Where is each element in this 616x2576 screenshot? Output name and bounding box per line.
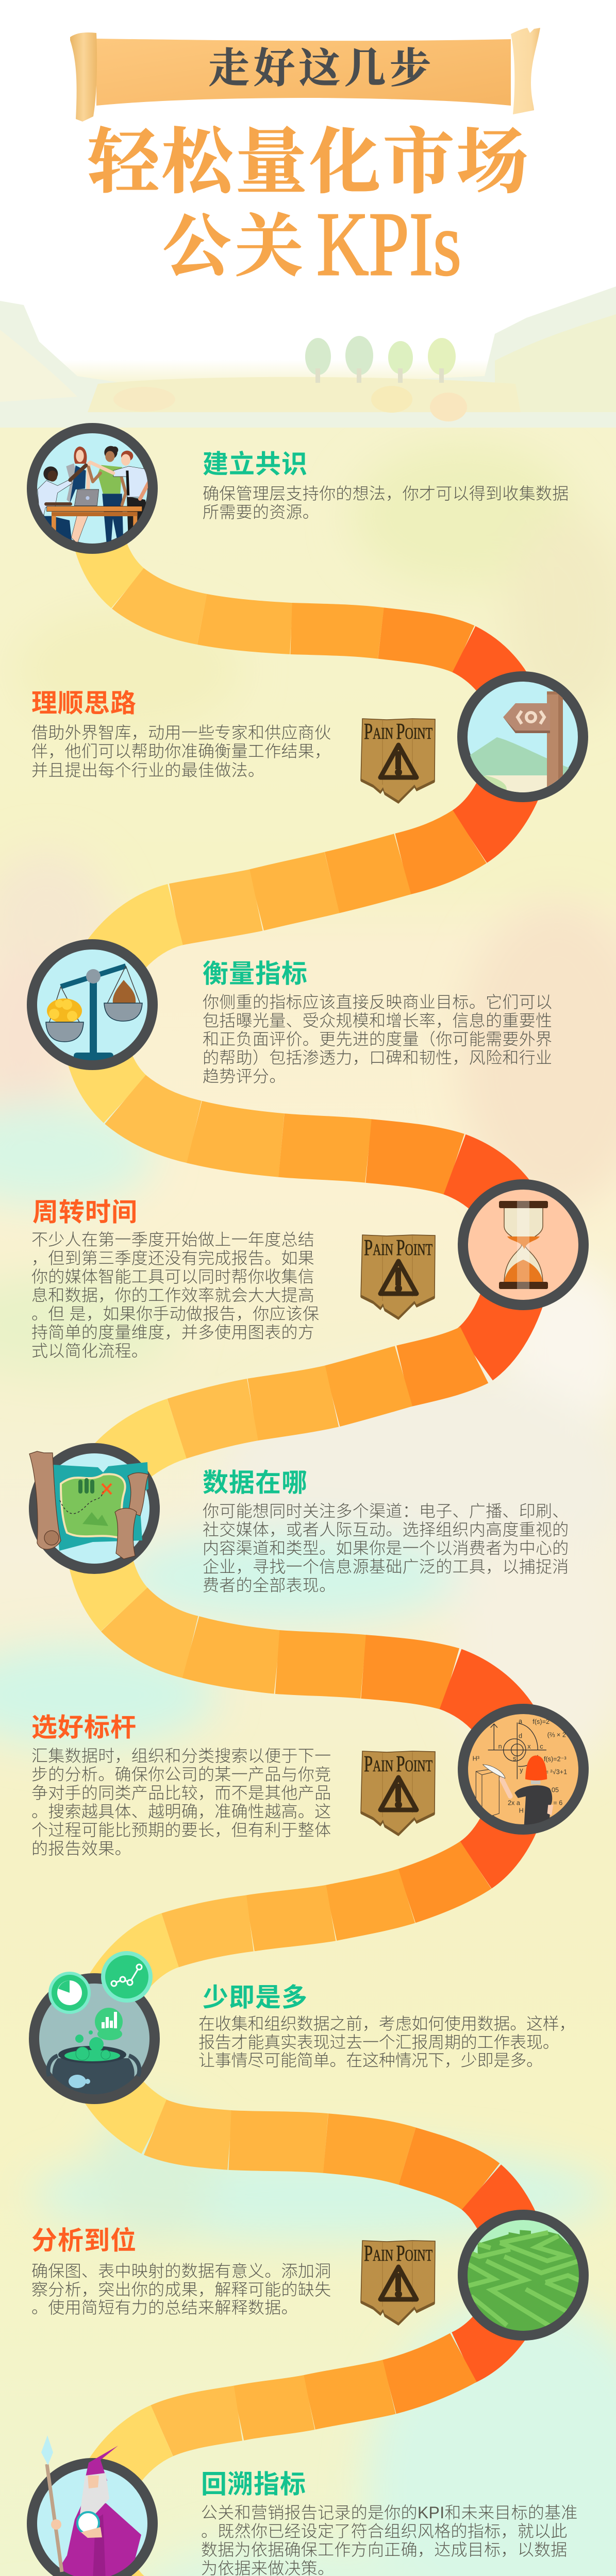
- icon: signpost: [459, 676, 588, 807]
- body text: [31, 1747, 331, 1858]
- body text: 让事情尽可能简单。在这种情况下，少即是多。: [198, 2051, 543, 2070]
- body text: 持简单的度量维度，并多使用图表的方: [31, 1323, 314, 1342]
- badge: pain point: PAIN POINT: [364, 1235, 432, 1260]
- badge: pain point: [361, 719, 435, 804]
- badge: pain point: PAIN POINT: [364, 2241, 432, 2266]
- icon: team high five: [32, 428, 153, 549]
- body text: 确保图、表中映射的数据有意义。添加洞: [31, 2262, 331, 2280]
- body text: [31, 1230, 319, 1360]
- step 4: turnaround time: [31, 1184, 584, 1360]
- body text: [31, 2262, 331, 2317]
- icon: person at math board: x: [527, 1743, 531, 1750]
- badge: pain point: PAIN POINT: [364, 719, 432, 744]
- heading: 建立共识: [203, 450, 308, 479]
- icon: cauldron with data bubbles: [34, 1951, 155, 2099]
- icon: person at math board: y: [520, 1767, 523, 1774]
- body text: 你侧重的指标应该直接反映商业目标。它们可以: [203, 993, 552, 1011]
- body text: 。搜索越具体、越明确，准确性越高。这: [31, 1802, 331, 1821]
- body text: [31, 723, 331, 779]
- icon: person at math board: [463, 1709, 584, 1829]
- heading: 少即是多: [203, 1983, 308, 2012]
- body text: ，但到第三季度还没有完成报告。如果: [31, 1249, 314, 1267]
- icon: wizard: [32, 2435, 153, 2576]
- title: KPIs: [317, 194, 461, 295]
- body text: 包括曝光量、受众规模和增长率，信息的重要性: [203, 1011, 552, 1030]
- icon: treasure map: [29, 1448, 155, 1569]
- body text: 报告才能真实表现过去一个汇报周期的工作表现。: [198, 2033, 559, 2052]
- body text: 数据为依据确保工作方向正确，达成目标，以数据: [201, 2540, 568, 2559]
- body text: [203, 484, 569, 521]
- icon: person at math board: d: [519, 1732, 522, 1739]
- heading: 周转时间: [32, 1198, 138, 1227]
- icon: person at math board: c: [540, 1743, 543, 1750]
- banner: top scroll: [70, 28, 540, 122]
- heading: 衡量指标: [203, 959, 308, 988]
- title: [88, 123, 530, 295]
- body text: 的帮助）包括渗透力，口碑和韧性，风险和行业: [203, 1048, 552, 1067]
- body text: 公关和营销报告记录的是你的KPI和未来目标的基准: [201, 2503, 578, 2522]
- icon: person at math board: s: [513, 1755, 516, 1762]
- step 3: metrics: [32, 944, 552, 1086]
- body text: 借助外界智库，动用一些专家和供应商伙: [31, 723, 331, 742]
- step 9: review metrics: [32, 2435, 578, 2576]
- badge: pain point: [361, 1751, 435, 1836]
- step 1: build consensus: [32, 428, 569, 549]
- body text: 费者的全部表现。: [203, 1576, 336, 1595]
- icon: person at math board: a: [519, 1718, 523, 1725]
- icon: hourglass: [463, 1184, 584, 1305]
- icon: person at math board: 2x a: [508, 1799, 521, 1806]
- icon: balance scale: [32, 944, 153, 1065]
- icon: person at math board: = ²√3+1: [545, 1768, 567, 1775]
- step 7: less is more: [34, 1951, 575, 2099]
- body text: [203, 1502, 569, 1595]
- icon: person at math board: f(s)=2: [532, 1718, 550, 1725]
- badge: pain point: PAIN POINT: [364, 1752, 432, 1776]
- body text: 企业，寻找一个信息源基础广泛的工具，以捕捉消: [203, 1557, 569, 1576]
- body text: 内容渠道和类型。如果你是一个以消费者为中心的: [203, 1539, 569, 1557]
- body text: 争对手的同类产品比较，而不是其他产品: [31, 1784, 331, 1802]
- body text: 。既然你已经设定了符合组织风格的指标，就以此: [201, 2522, 568, 2540]
- body text: [203, 993, 552, 1086]
- winding road path: [92, 515, 523, 2576]
- badge: pain point: [361, 1235, 435, 1320]
- icon: person at math board: f(s)=2⁻³: [544, 1755, 567, 1762]
- body text: 社交媒体，或者人际互动。选择组织内高度重视的: [203, 1520, 569, 1539]
- icon: person at math board: = 6: [553, 1799, 562, 1806]
- body text: 并且提出每个行业的最佳做法。: [31, 761, 264, 779]
- body text: 确保管理层支持你的想法，你才可以得到收集数据: [203, 484, 569, 503]
- body text: 察分析，突出你的成果，解释可能的缺失: [31, 2280, 331, 2299]
- body text: 趋势评分。: [203, 1067, 286, 1086]
- icon: person at math board: H: [519, 1807, 524, 1814]
- icon: person at math board: H³: [473, 1755, 479, 1762]
- heading: 选好标杆: [31, 1713, 137, 1742]
- icon: person at math board: (⅔ × 2: [547, 1732, 566, 1739]
- icon: person at math board: 05: [552, 1786, 559, 1793]
- body text: 。使用简短有力的总结来解释数据。: [31, 2298, 298, 2317]
- body text: 的报告效果。: [31, 1839, 131, 1858]
- body text: [198, 2014, 575, 2070]
- body text: 汇集数据时，组织和分类搜索以便于下一: [31, 1747, 331, 1765]
- body text: 式以简化流程。: [31, 1342, 148, 1360]
- icon: hedge maze: [463, 2215, 584, 2339]
- body text: 息和数据，你的工作效率就会大大提高: [31, 1286, 314, 1304]
- heading: 分析到位: [31, 2226, 137, 2255]
- distant hills and trees: [0, 286, 616, 428]
- title: 公关: [163, 209, 307, 285]
- body text: 你可能想同时关注多个渠道：电子、广播、印刷、: [203, 1502, 569, 1520]
- banner text: 走好这几步: [208, 46, 435, 92]
- body text: 。但 是，如果你手动做报告，你应该保: [31, 1304, 319, 1323]
- badge: pain point: [361, 2241, 435, 2326]
- body text: 所需要的资源。: [203, 503, 319, 521]
- heading: 理顺思路: [31, 689, 137, 718]
- body text: 在收集和组织数据之前，考虑如何使用数据。这样，: [198, 2014, 575, 2033]
- step 8: analyse: [31, 2215, 584, 2339]
- body text: 你的媒体智能工具可以同时帮你收集信: [31, 1267, 314, 1286]
- heading: 回溯指标: [201, 2470, 306, 2499]
- step 6: benchmark: [31, 1709, 584, 1858]
- body text: 和正负面评价。更先进的度量（你可能需要外界: [203, 1030, 552, 1048]
- body text: 伴，他们可以帮助你准确衡量工作结果，: [31, 742, 331, 760]
- step 2: clarify thinking: [31, 676, 588, 807]
- title: 轻松量化市场: [88, 123, 530, 202]
- heading: 数据在哪: [203, 1468, 308, 1497]
- body text: 个过程可能比预期的要长，但有利于整体: [31, 1821, 331, 1839]
- body text: [201, 2503, 578, 2576]
- icon: person at math board: n: [498, 1743, 502, 1750]
- body text: 不少人在第一季度开始做上一年度总结: [31, 1230, 314, 1249]
- step 5: where the data is: [29, 1448, 569, 1595]
- body text: 步的分析。确保你公司的某一产品与你竞: [31, 1765, 331, 1784]
